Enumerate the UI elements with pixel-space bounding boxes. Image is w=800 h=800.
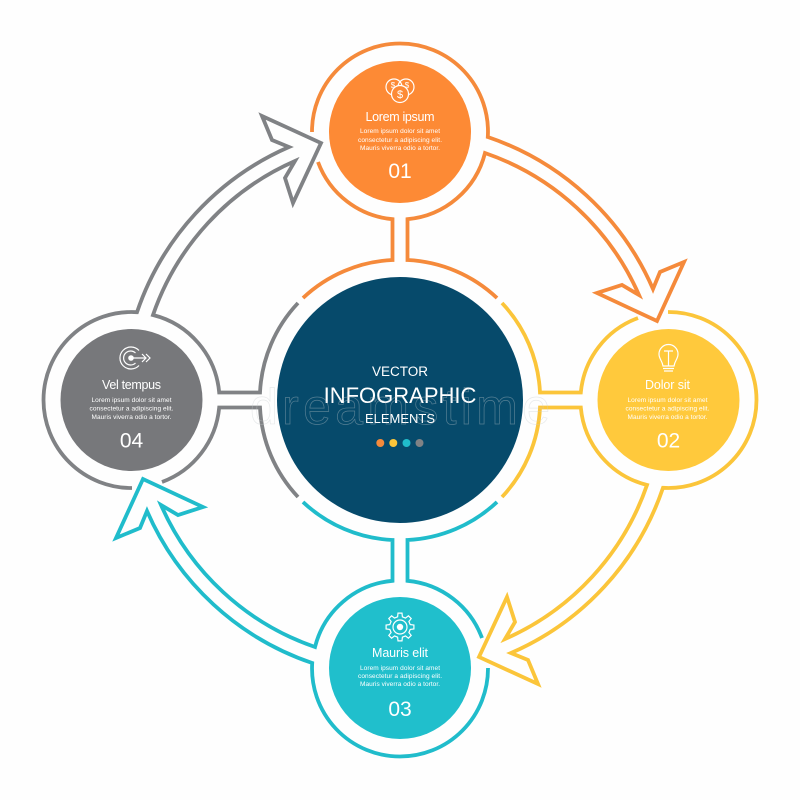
panel: step 04: Mauris viverra odio a tortor. [92, 414, 172, 421]
panel: step 02: 02 [657, 430, 680, 452]
panel: step 01: Mauris viverra odio a tortor. [360, 145, 440, 152]
panel: step 03 [329, 597, 471, 739]
outline: teal segment with ring and arrow [116, 479, 497, 756]
panel: step 01: Lorem ipsum dolor sit amet [360, 128, 440, 135]
center title: INFOGRAPHIC [324, 383, 476, 408]
panel: step 02: consectetur a adipiscing elit. [626, 406, 710, 412]
panel: step 01: Lorem ipsum [366, 110, 434, 124]
panel: step 03: consectetur a adipiscing elit. [358, 673, 442, 680]
icon: coins [386, 79, 414, 102]
panel: step 03: Mauris elit [372, 646, 429, 660]
outline: orange segment with ring and arrow [303, 44, 684, 321]
center title: ELEMENTS [365, 411, 435, 426]
panel: step 04 [60, 329, 202, 471]
panel: step 03: 03 [388, 698, 412, 721]
panel: step 01 [329, 61, 471, 203]
center circle [277, 277, 523, 523]
icon: light bulb [659, 344, 678, 371]
panel: step 02: Dolor sit [645, 378, 691, 392]
outline: grey segment with ring and arrow [44, 116, 321, 497]
icon: coins: $ [391, 81, 396, 90]
panel: step 02: Lorem ipsum dolor sit amet [628, 397, 708, 404]
center title: VECTOR [372, 364, 428, 379]
panel: step 01: 01 [388, 160, 412, 183]
panel: step 04: 04 [120, 430, 143, 452]
panel: step 03: Mauris viverra odio a tortor. [360, 681, 440, 688]
colour dots [376, 439, 424, 447]
panel: step 04: Vel tempus [102, 378, 161, 392]
panel: step 04: Lorem ipsum dolor sit amet [92, 397, 172, 404]
outline: yellow segment with ring and arrow [479, 303, 756, 684]
panel: step 01: consectetur a adipiscing elit. [358, 137, 442, 144]
icon: coins: $ [405, 81, 410, 90]
icon: gear [386, 613, 414, 641]
watermark: dreamstime [250, 379, 550, 435]
center title [324, 364, 476, 426]
icon: coins: $ [397, 89, 403, 101]
icon: target [120, 347, 150, 369]
panel: step 02: Mauris viverra odio a tortor. [628, 414, 708, 421]
panel: step 03: Lorem ipsum dolor sit amet [360, 665, 440, 672]
panel: step 02 [598, 329, 740, 471]
panel: step 04: consectetur a adipiscing elit. [90, 406, 174, 412]
